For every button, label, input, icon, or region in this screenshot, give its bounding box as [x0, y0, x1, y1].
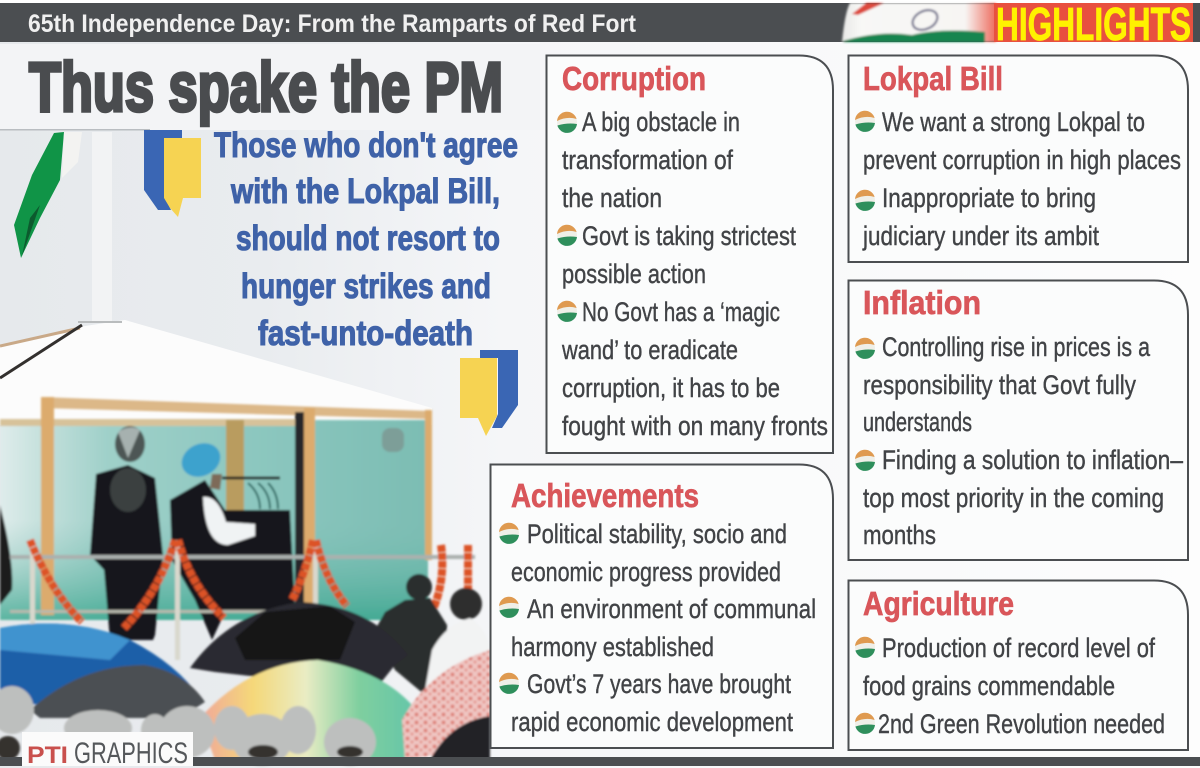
point: big obstacle: transformation of [562, 145, 733, 175]
point: judiciary: judiciary under its ambit [862, 221, 1099, 251]
point: communal harmony: An environment of communal [527, 594, 816, 624]
closing quote mark [460, 350, 518, 436]
point: strong lokpal: We want a strong Lokpal to [882, 107, 1145, 137]
pull quote: Those who don't agree [214, 126, 518, 165]
point: strictest action [557, 221, 796, 289]
point: strictest action: Govt is taking strictest [582, 221, 796, 251]
point: communal harmony [499, 594, 816, 662]
point: strong lokpal [855, 107, 1181, 175]
panel: inflation [848, 280, 1188, 560]
panel: agriculture [848, 580, 1188, 750]
blue umbrella [0, 624, 200, 705]
black umbrella [190, 602, 408, 690]
opening quote mark [144, 130, 201, 217]
point: no magic wand [557, 297, 828, 441]
crowd [0, 686, 376, 766]
panel: corruption [546, 55, 833, 453]
heading: achievements: Achievements [511, 477, 699, 514]
point: strictest action: possible action [562, 259, 706, 289]
rainbow umbrella [200, 660, 412, 760]
point: top priority [855, 445, 1183, 550]
pull quote [214, 126, 518, 353]
heading: inflation: Inflation [863, 284, 981, 321]
point: political stability: economic progress provided [511, 557, 781, 587]
point: communal harmony: harmony established [511, 632, 714, 662]
photo: PM at lectern with umbrellas [0, 320, 490, 766]
header title: 65th Independence Day: From the Ramparts of Red Fort [28, 10, 637, 38]
point: economic development: Govt’s 7 years have brought [527, 669, 791, 699]
bottom rule [0, 757, 1200, 766]
point: no magic wand: wand’ to eradicate [561, 335, 738, 365]
point: economic development: rapid economic development [511, 707, 793, 737]
point: controlling prices [855, 332, 1151, 437]
panel: lokpal bill [848, 55, 1188, 262]
point: judiciary: Inappropriate to bring [882, 183, 1096, 213]
PTI graphics badge [22, 732, 193, 768]
grey umbrella [30, 665, 205, 718]
point: controlling prices: understands [863, 407, 972, 437]
pull quote: should not resort to [236, 219, 500, 258]
point: political stability: Political stability, socio and [527, 519, 787, 549]
people on the right [406, 574, 432, 600]
point: top priority: months [863, 520, 936, 550]
point: judiciary [855, 183, 1099, 251]
main title: Thus spake the PM [29, 48, 503, 126]
pink umbrella [402, 650, 490, 760]
heading: agriculture: Agriculture [863, 585, 1014, 622]
point: political stability [499, 519, 787, 587]
point: economic development [499, 669, 793, 737]
point: big obstacle: the nation [562, 183, 662, 213]
point: no magic wand: corruption, it has to be [562, 373, 780, 403]
glass frame [41, 397, 430, 419]
rail [10, 555, 475, 559]
heading: corruption: Corruption [562, 60, 706, 97]
header bar [0, 3, 1200, 42]
pull quote: with the Lokpal Bill, [230, 172, 500, 211]
garlands [30, 540, 468, 628]
PM in blue turban [170, 480, 295, 640]
point: no magic wand: fought with on many fronts [562, 411, 828, 441]
point: controlling prices: responsibility that Govt fully [863, 370, 1136, 400]
pull quote: hunger strikes and [241, 267, 491, 306]
point: record production [855, 633, 1155, 701]
pull quote: fast-unto-death [258, 314, 473, 353]
canopy roof [0, 320, 432, 425]
point: record production: food grains commendable [863, 671, 1115, 701]
heading: lokpal bill: Lokpal Bill [863, 60, 1003, 97]
man standing [115, 426, 145, 462]
icon: waving flag [14, 132, 82, 258]
flag pole [92, 132, 112, 322]
heading band [0, 44, 540, 130]
point: no magic wand: No Govt has a ‘magic [582, 297, 780, 327]
flag banner [842, 3, 996, 42]
point: big obstacle: A big obstacle in [582, 107, 740, 137]
point: big obstacle [557, 107, 740, 213]
panel: achievements [490, 464, 833, 748]
